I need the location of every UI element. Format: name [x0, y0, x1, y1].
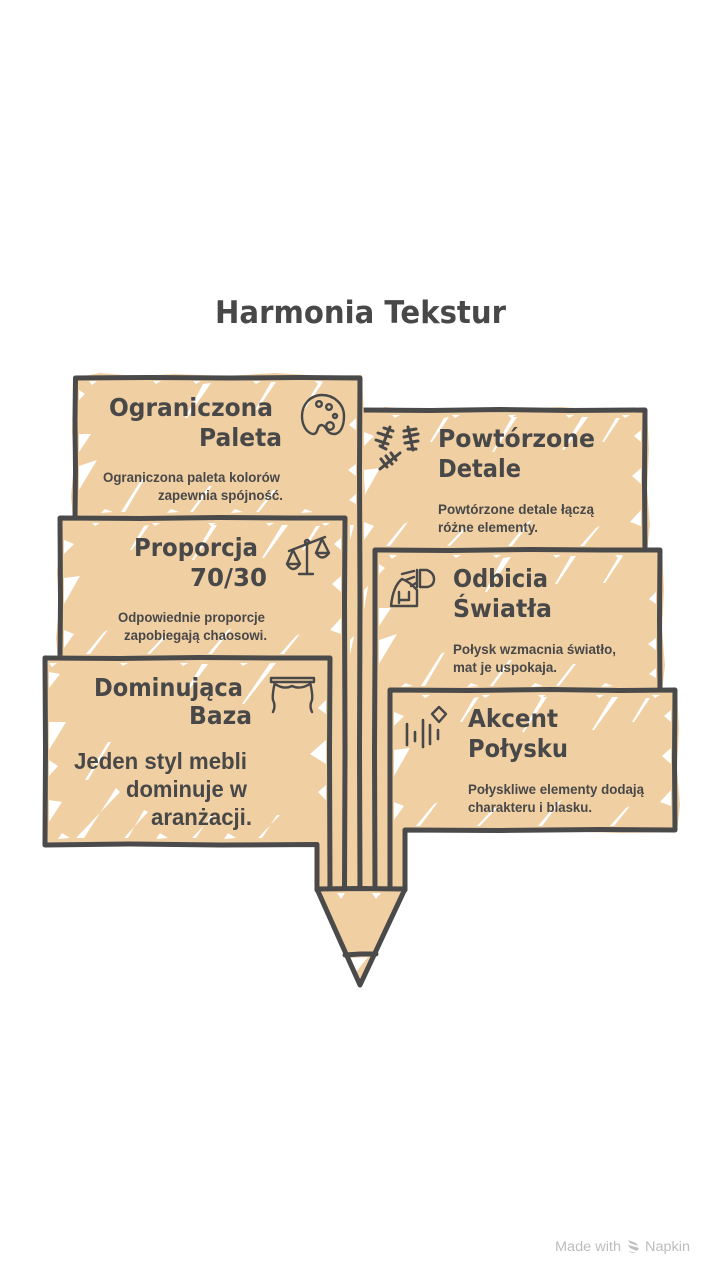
panel: Odbicia Światła [371, 547, 665, 890]
panel: Powtórzone Detale [356, 407, 650, 553]
heading: Akcent Połysku: Akcent [468, 704, 558, 733]
body text: Dominująca Baza: Jeden styl mebli [74, 748, 247, 774]
body text: Dominująca Baza: aranżacji. [151, 804, 252, 830]
panel: Ograniczona Paleta [71, 373, 365, 890]
heading: Powtórzone Detale: Powtórzone [438, 424, 595, 453]
body text: Proporcja 70/30 [118, 609, 267, 643]
heading: Ograniczona Paleta: Ograniczona [109, 393, 273, 422]
body text: Proporcja 70/30: Odpowiednie proporcje [118, 609, 265, 625]
heading: Odbicia Światła: Światła [453, 593, 552, 623]
heading: Odbicia Światła: Odbicia [453, 564, 548, 593]
heading: Odbicia Światła [453, 564, 552, 623]
heading: Dominująca Baza: Baza [189, 701, 252, 730]
icon: Napkin logo [628, 1240, 639, 1253]
pencil tip [317, 888, 405, 985]
icon: paint palette [302, 395, 344, 434]
footer: Made with Napkin: Made with [555, 1239, 621, 1254]
body text: Ograniczona Paleta: zapewnia spójność. [158, 487, 283, 503]
icon: repeated botanical details [376, 427, 418, 469]
icon: balance scale [287, 537, 329, 574]
heading: Dominująca Baza: Dominująca [94, 673, 243, 702]
icon: sparkle and gloss lines [407, 707, 446, 747]
footer: Made with Napkin [555, 1239, 690, 1254]
heading: Proporcja 70/30 [134, 533, 267, 592]
heading: Powtórzone Detale [438, 424, 595, 483]
body text: Ograniczona Paleta: Ograniczona paleta kolorów [103, 469, 280, 485]
pencil body [317, 516, 405, 890]
body text: Odbicia Światła: mat je uspokaja. [453, 659, 557, 675]
body text: Akcent Połysku: Połyskliwe elementy dodają [468, 781, 644, 797]
heading: Akcent Połysku: Połysku [468, 734, 568, 763]
footer: Made with Napkin: Napkin [645, 1239, 690, 1254]
panel: Proporcja 70/30 [56, 515, 350, 890]
body text: Ograniczona Paleta [103, 469, 283, 503]
body text: Proporcja 70/30: zapobiegają chaosowi. [124, 627, 267, 643]
body text: Dominująca Baza [74, 748, 252, 830]
panel: Dominująca Baza [43, 655, 332, 890]
body text: Odbicia Światła [453, 641, 616, 675]
body text: Odbicia Światła: Połysk wzmacnia światło, [453, 641, 616, 657]
body text: Powtórzone Detale: różne elementy. [438, 519, 538, 535]
body text: Powtórzone Detale: Powtórzone detale łączą [438, 501, 594, 517]
heading: Akcent Połysku [468, 704, 568, 763]
heading: Dominująca Baza [94, 673, 252, 730]
heading: Powtórzone Detale: Detale [438, 454, 521, 483]
title: Harmonia Tekstur [215, 295, 507, 331]
heading: Proporcja 70/30: 70/30 [190, 563, 267, 592]
body text: Akcent Połysku: charakteru i blasku. [468, 799, 592, 815]
body text: Powtórzone Detale [438, 501, 594, 535]
panel: Akcent Połysku [386, 687, 680, 890]
icon: furniture table [271, 678, 314, 712]
icon: light reflection [391, 570, 434, 606]
body text: Dominująca Baza: dominuje w [126, 776, 247, 802]
heading: Ograniczona Paleta [109, 393, 282, 452]
body text: Akcent Połysku [468, 781, 644, 815]
heading: Proporcja 70/30: Proporcja [134, 533, 258, 562]
heading: Ograniczona Paleta: Paleta [199, 423, 282, 452]
